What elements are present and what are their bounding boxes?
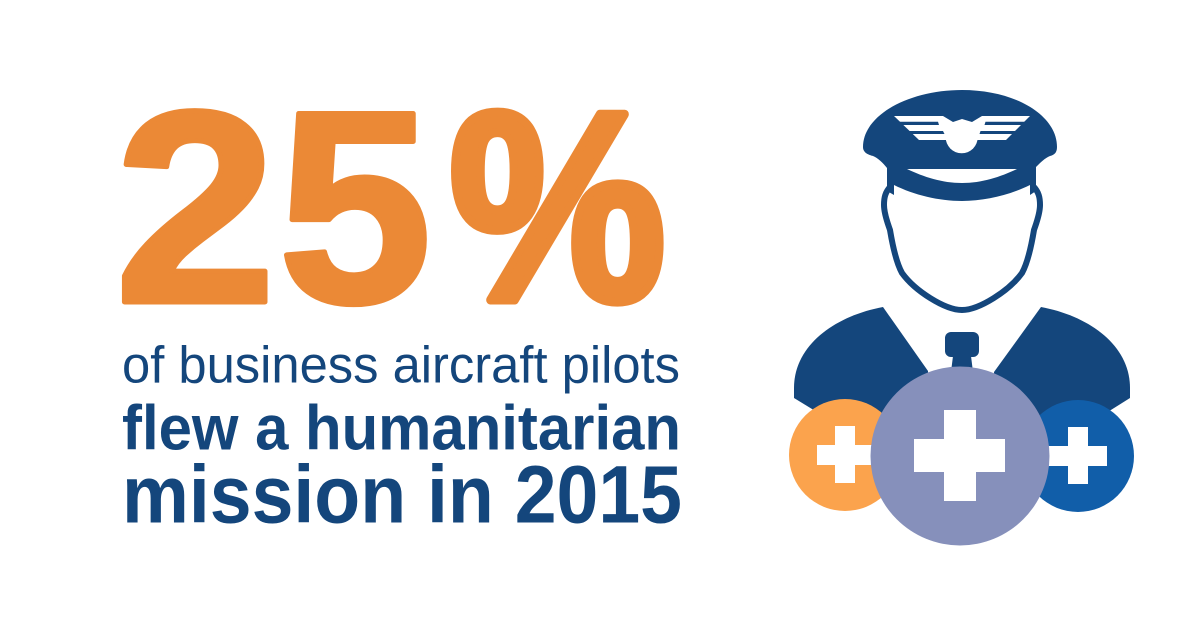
percent sign: % (449, 57, 666, 358)
lavender circle (870, 366, 1050, 546)
orange circle (789, 399, 901, 511)
pilot tie (945, 332, 979, 372)
cap crown and band (863, 90, 1057, 201)
pilot cap (863, 90, 1057, 201)
lavender badge cross (914, 410, 1005, 501)
pilot left shoulder (794, 307, 930, 420)
pilot face outline (884, 186, 1040, 310)
pilot right shoulder (990, 307, 1130, 420)
statement text block (122, 336, 682, 540)
icon: pilot with medical badges (789, 90, 1134, 546)
text line: mission in 2015: mission in 2015 (122, 450, 682, 540)
blue medical badge (1022, 400, 1134, 512)
big statistic: 25% (114, 55, 666, 361)
badge wings (894, 116, 1030, 140)
digit 5: 5 (278, 55, 432, 361)
blue badge cross (1045, 427, 1107, 484)
central lavender medical badge (870, 366, 1050, 546)
text line: of business aircraft pilots: of business aircraft pilots (122, 336, 680, 394)
text line: flew a humanitarian: flew a humanitarian (122, 394, 681, 464)
cap wings badge (894, 116, 1030, 153)
orange medical badge (789, 399, 901, 511)
badge centre disc (946, 121, 978, 153)
digit 2: 2 (114, 55, 276, 361)
orange badge cross (817, 426, 880, 483)
badge wing stripes (897, 122, 1027, 134)
cap visor highlight (907, 169, 1017, 183)
tie knot (945, 332, 979, 357)
blue circle (1022, 400, 1134, 512)
tie body (951, 356, 973, 372)
